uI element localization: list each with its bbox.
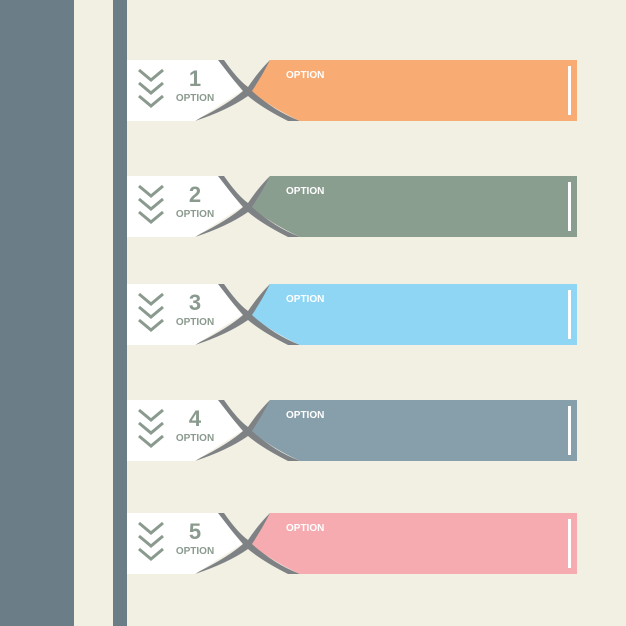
number 4: 4 (189, 406, 202, 431)
row 5 (127, 513, 577, 574)
row 4: OPTION (176, 433, 214, 444)
row 2: OPTION (176, 209, 214, 220)
gray connector (195, 513, 300, 574)
white tab (127, 176, 242, 237)
band text: OPTION (286, 70, 324, 81)
number 2: 2 (189, 182, 201, 207)
row 4: OPTION (286, 410, 324, 421)
row 3: OPTION (286, 294, 324, 305)
icon: chevrons (139, 523, 163, 559)
colored band (252, 176, 577, 237)
row 3 (127, 284, 577, 345)
row 3: OPTION (176, 317, 214, 328)
label: OPTION (176, 93, 214, 104)
number 3: 3 (189, 290, 201, 315)
gray connector (195, 176, 300, 237)
white tab (127, 284, 242, 345)
row 2: OPTION (286, 186, 324, 197)
white tab (127, 400, 242, 461)
icon: chevrons (139, 186, 163, 222)
gray connector (195, 400, 300, 461)
colored band (252, 284, 577, 345)
gray connector (195, 60, 300, 121)
white tab (127, 60, 242, 121)
gray connector (195, 284, 300, 345)
number 1: 1 (189, 66, 201, 91)
left sidebar bar (0, 0, 74, 626)
row 2 (127, 176, 577, 237)
white tab (127, 513, 242, 574)
number 5: 5 (189, 519, 201, 544)
icon: chevrons (139, 70, 163, 106)
thin vertical bar (113, 0, 127, 626)
colored band (252, 513, 577, 574)
row 4 (127, 400, 577, 461)
colored band (252, 400, 577, 461)
row 5: OPTION (286, 523, 324, 534)
icon: chevrons (139, 410, 163, 446)
row 5: OPTION (176, 546, 214, 557)
colored band (252, 60, 577, 121)
row 1 (127, 60, 577, 121)
icon: chevrons (139, 294, 163, 330)
